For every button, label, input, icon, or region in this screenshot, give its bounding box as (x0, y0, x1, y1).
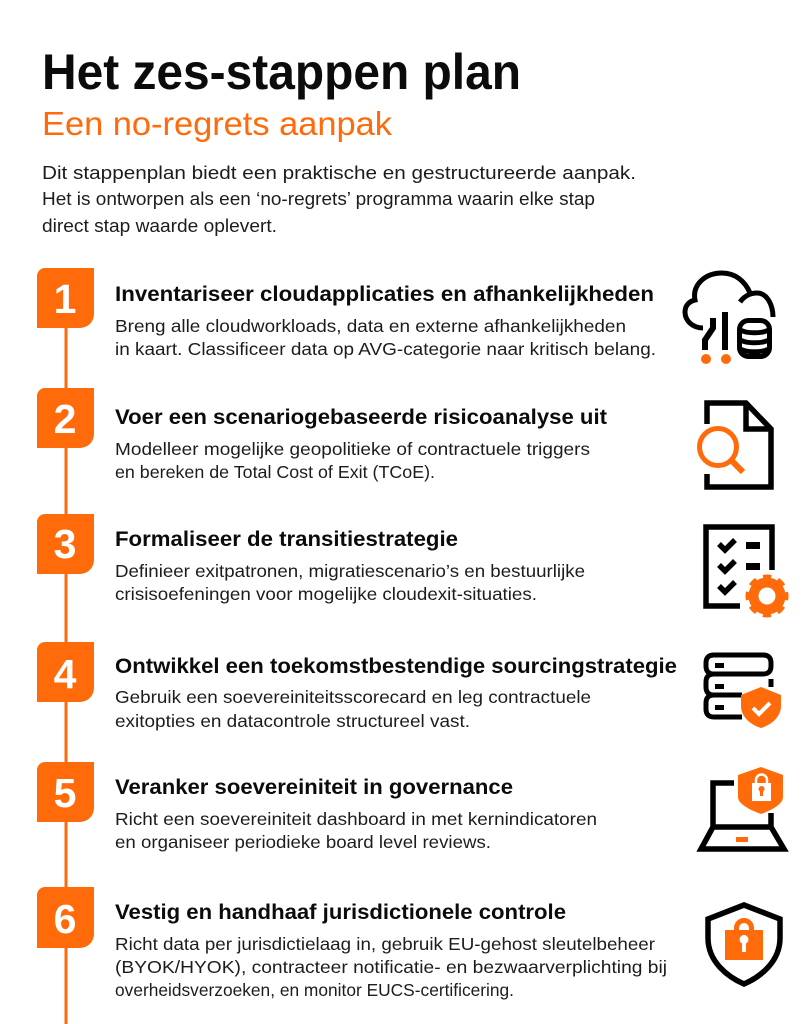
icon: laptop with shield (701, 767, 784, 849)
step 4 (37, 642, 677, 731)
heading 3: Formaliseer de transitiestrategie (115, 528, 458, 551)
step 1 (37, 268, 656, 359)
badge 1: 1 (54, 276, 76, 322)
description 6 (115, 934, 667, 1000)
icon: cloud with database (685, 273, 773, 364)
intro text: direct stap waarde oplevert. (42, 216, 277, 236)
description 1 (115, 316, 656, 359)
badge 4 (37, 642, 94, 702)
badge 2 (37, 388, 94, 448)
step 2 (37, 388, 607, 482)
description 1: Breng alle cloudworkloads, data en externe afhankelijkheden (115, 316, 626, 336)
step 5 (37, 762, 597, 852)
heading 4: Ontwikkel een toekomstbestendige sourcingstrategie (115, 655, 677, 678)
icon: document with magnifier (700, 403, 771, 487)
description 3 (115, 561, 585, 604)
description 3: Definieer exitpatronen, migratiescenario’s en bestuurlijke (115, 561, 585, 581)
badge 2: 2 (54, 396, 76, 442)
badge 3: 3 (54, 521, 76, 567)
description 3: crisisoefeningen voor mogelijke cloudexit-situaties. (115, 584, 537, 604)
icon: servers with shield (706, 655, 781, 728)
badge 6 (37, 887, 94, 948)
badge 5 (37, 762, 94, 822)
description 1: in kaart. Classificeer data op AVG-categorie naar kritisch belang. (115, 339, 656, 359)
description 6: overheidsverzoeken, en monitor EUCS-certificering. (115, 980, 514, 1000)
badge 3 (37, 514, 94, 574)
subtitle: Een no-regrets aanpak (42, 105, 393, 142)
title: Het zes-stappen plan (42, 44, 521, 100)
description 5: en organiseer periodieke board level reviews. (115, 832, 491, 852)
description 4: Gebruik een soevereiniteitsscorecard en leg contractuele (115, 687, 591, 707)
description 2: en bereken de Total Cost of Exit (TCoE). (115, 462, 435, 482)
description 4: exitopties en datacontrole structureel vast. (115, 711, 470, 731)
badge 4: 4 (54, 651, 77, 697)
description 5: Richt een soevereiniteit dashboard in met kernindicatoren (115, 809, 597, 829)
heading 6: Vestig en handhaaf jurisdictionele controle (115, 901, 566, 924)
intro text: Het is ontworpen als een ‘no-regrets’ programma waarin elke stap (42, 189, 595, 209)
badge 5: 5 (54, 770, 76, 816)
intro text (42, 163, 636, 236)
heading 2: Voer een scenariogebaseerde risicoanalyse uit (115, 406, 607, 429)
description 2 (115, 439, 590, 482)
description 6: Richt data per jurisdictielaag in, gebruik EU-gehost sleutelbeheer (115, 934, 655, 954)
timeline line (64, 300, 68, 1024)
heading 5: Veranker soevereiniteit in governance (115, 776, 513, 799)
description 2: Modelleer mogelijke geopolitieke of contractuele triggers (115, 439, 590, 459)
badge 6: 6 (54, 896, 76, 942)
description 6: (BYOK/HYOK), contracteer notificatie- en bezwaarverplichting bij (115, 957, 667, 977)
description 5 (115, 809, 597, 852)
heading 1: Inventariseer cloudapplicaties en afhankelijkheden (115, 283, 654, 306)
intro text: Dit stappenplan biedt een praktische en gestructureerde aanpak. (42, 163, 636, 183)
badge 1 (37, 268, 94, 328)
step 3 (37, 514, 585, 604)
icon: shield with padlock (708, 905, 780, 984)
icon: checklist with gear (706, 527, 786, 615)
description 4 (115, 687, 591, 731)
step 6 (37, 887, 667, 1000)
